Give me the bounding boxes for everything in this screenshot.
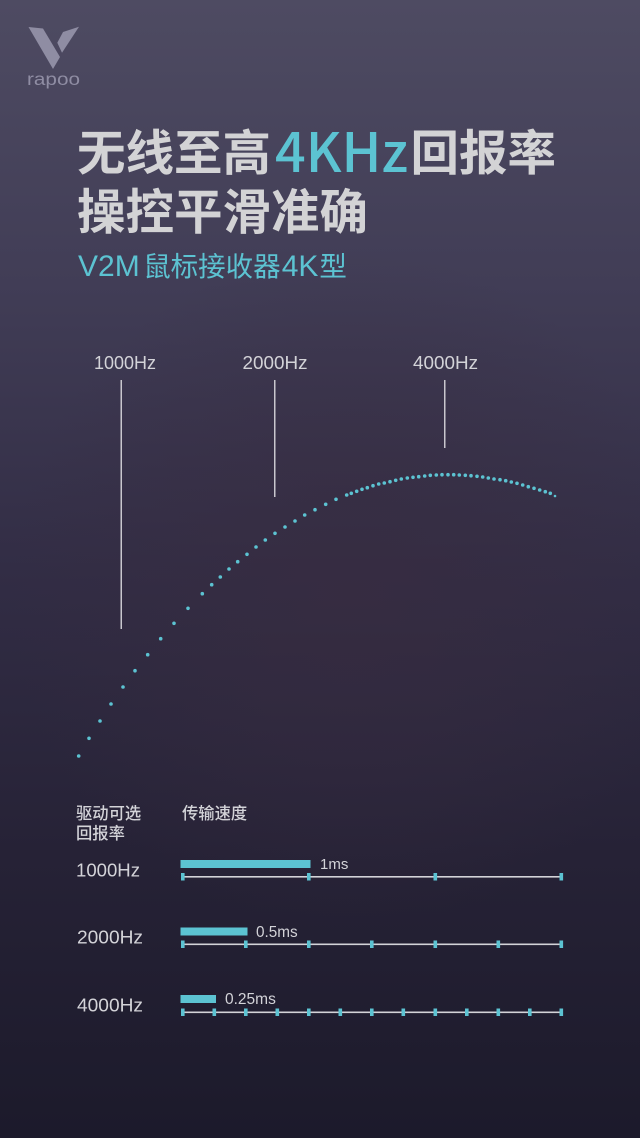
table headings [76,804,247,843]
title line 1 [77,109,556,188]
row: 4000Hz: 4000Hz [77,994,143,1016]
chart: polling rate curve [77,352,556,758]
subtitle: V2M鼠标接收器4K型 [78,250,347,283]
title line 1: 4KHz [275,109,408,188]
row: 4000Hz: 0.25ms [225,991,276,1008]
dotted curve [77,473,556,758]
row: 2000Hz: 2000Hz [77,926,143,948]
row: 1000Hz: 1000Hz [76,860,140,880]
table headings: 驱动可选 [76,805,141,823]
table headings: 回报率 [76,825,125,843]
title line 1: 无线至高 [77,127,271,181]
row: 1000Hz [76,856,563,880]
table headings: 传输速度 [182,804,247,823]
row: 1000Hz: 1ms [320,856,348,873]
title line 1: 回报率 [410,127,556,181]
logo: rapoo: rapoo [27,69,80,89]
label: 4000Hz marker: 4000Hz [413,352,478,373]
row: 2000Hz [77,924,563,948]
row: 4000Hz [77,991,563,1016]
title [77,109,556,240]
logo: rapoo [27,27,80,89]
label: 1000Hz marker: 1000Hz [94,352,156,373]
row: 2000Hz: 0.5ms [256,924,298,941]
label: 2000Hz marker: 2000Hz [242,352,308,373]
label: 4000Hz marker [413,352,478,448]
title line 2: 操控平滑准确 [77,186,368,240]
